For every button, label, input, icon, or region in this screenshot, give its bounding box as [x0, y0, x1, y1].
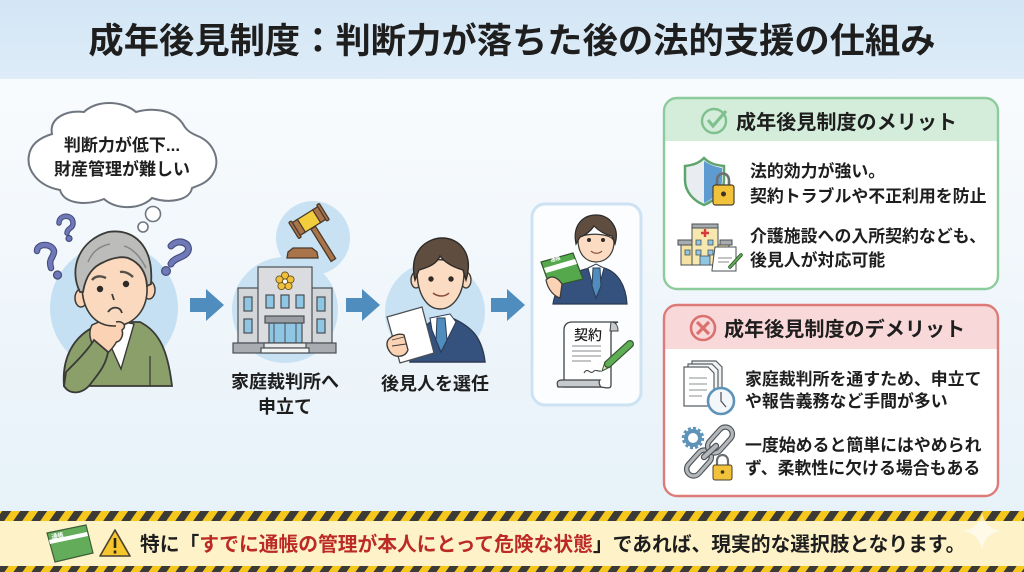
text: facility contracts: 介護施設への入所契約なども、 [750, 227, 986, 246]
text: inflexibility: ず、柔軟性に欠ける場合もある [745, 458, 980, 478]
banner text: 特に「すでに通帳の管理が本人にとって危険な状態」であれば、現実的な選択肢となります。 [140, 533, 965, 556]
heading: demerits: 成年後見制度のデメリット [724, 317, 965, 341]
icon: gear, chain and lock [683, 424, 735, 480]
heading: merits: 成年後見制度のメリット [736, 110, 957, 134]
icon: contract and pen [557, 322, 630, 388]
arrow 3 [491, 289, 525, 321]
icon: shield and lock [685, 158, 734, 205]
label: appoint: 後見人を選任 [381, 374, 489, 394]
question marks [37, 216, 188, 279]
text: procedures: や報告義務など手間が多い [745, 391, 948, 411]
icon: care facility and contract [678, 224, 741, 271]
text: legal force [750, 161, 987, 206]
illustration: guardian with document [381, 238, 489, 394]
panel: demerits [664, 305, 998, 496]
warning banner [0, 511, 1024, 572]
text: procedures [745, 369, 981, 411]
text: legal force: 契約トラブルや不正利用を防止 [750, 186, 987, 206]
thought bubble [29, 103, 216, 232]
thought bubble: 財産管理が難しい [54, 159, 190, 179]
label: petition: 家庭裁判所へ [231, 372, 339, 392]
title band [0, 0, 1024, 79]
text: facility contracts: 後見人が対応可能 [750, 250, 885, 270]
panel: merits [664, 98, 998, 289]
label: petition [231, 372, 339, 417]
icon: passbook [47, 525, 93, 562]
thought bubble: 判断力が低下... [64, 135, 180, 155]
icon: check circle [702, 109, 726, 133]
text: facility contracts [750, 227, 986, 270]
text: legal force: 法的効力が強い。 [750, 161, 885, 181]
illustration: family court with gavel [231, 201, 350, 417]
text: inflexibility: 一度始めると簡単にはやめられ [745, 435, 982, 455]
text: procedures: 家庭裁判所を通すため、申立て [745, 369, 981, 389]
sparkle [963, 511, 1001, 551]
text: inflexibility [745, 435, 982, 478]
icon: documents and clock [684, 361, 734, 414]
icon: guardian holding passbook [541, 215, 627, 304]
icon: gavel [287, 203, 349, 270]
icon: contract and pen: 契約 [574, 327, 602, 343]
icon: warning triangle [100, 530, 130, 556]
icon: court building [233, 267, 336, 353]
panel: guardian duties [532, 204, 641, 405]
illustration: worried elderly man [37, 216, 188, 392]
icon: passbook: 通帳 [51, 531, 64, 541]
icon: guardian holding passbook: 通帳 [550, 255, 561, 264]
label: petition: 申立て [258, 397, 312, 417]
arrow 2 [346, 289, 380, 321]
arrow 1 [190, 289, 224, 321]
icon: cross circle [691, 316, 715, 340]
title band: 成年後見制度：判断力が落ちた後の法的支援の仕組み [88, 22, 936, 61]
